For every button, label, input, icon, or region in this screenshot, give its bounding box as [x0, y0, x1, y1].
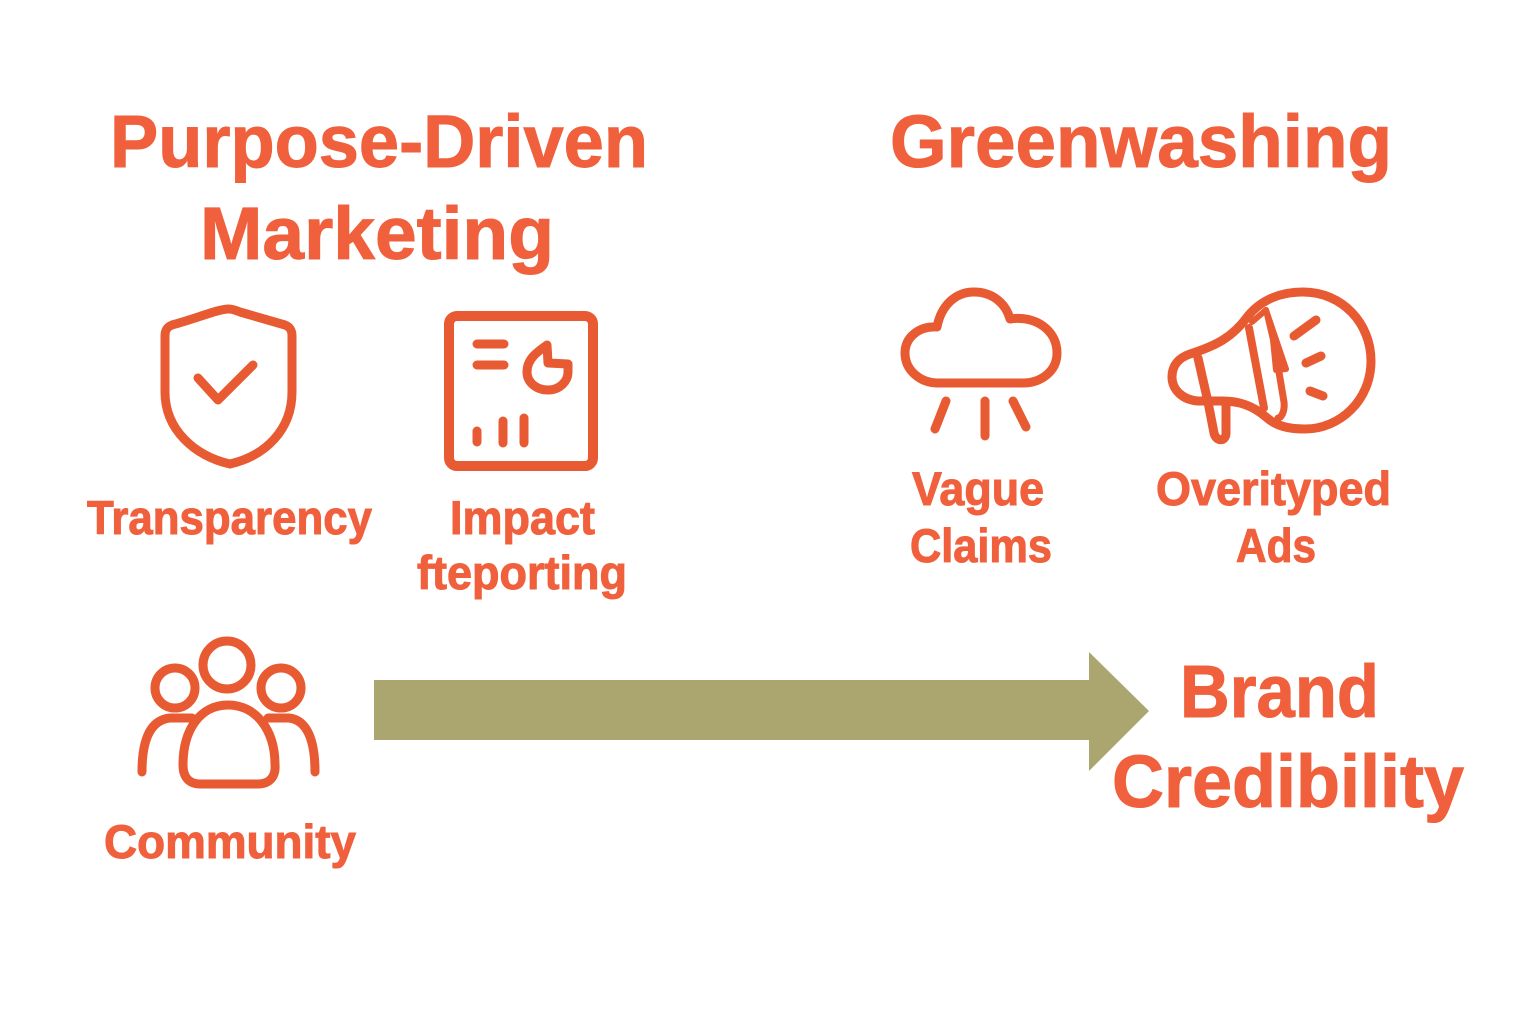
icon: shield with check [165, 309, 292, 464]
label: Overityped Ads: Ads [1236, 519, 1316, 572]
label: Community: Community [104, 815, 356, 868]
label: Vague Claims: Claims [910, 519, 1052, 572]
heading: Brand Credibility: Brand [1180, 650, 1379, 733]
heading: Brand Credibility: Credibility [1112, 740, 1464, 823]
label: Overityped Ads [1156, 462, 1391, 572]
heading: Purpose-Driven Marketing: Marketing [200, 192, 554, 275]
heading: Purpose-Driven Marketing [110, 100, 648, 275]
label: Impact Reporting: Impact [450, 491, 595, 544]
label: Overityped Ads: Overityped [1156, 462, 1391, 515]
heading: Purpose-Driven Marketing: Purpose-Driven [110, 100, 648, 183]
label: Transparency: Transparency [87, 491, 372, 544]
label: Vague Claims [910, 462, 1052, 572]
icon: community group [142, 641, 315, 784]
icon: rain cloud [905, 292, 1057, 436]
arrow to Brand Credibility [374, 652, 1149, 771]
icon: impact report [449, 316, 593, 466]
heading: Greenwashing: Greenwashing [890, 100, 1392, 183]
icon: megaphone in circle [1172, 292, 1371, 440]
label: Impact Reporting [417, 491, 627, 599]
heading: Brand Credibility [1112, 650, 1464, 823]
label: Impact Reporting: fteporting [417, 546, 627, 599]
label: Vague Claims: Vague [912, 462, 1044, 515]
